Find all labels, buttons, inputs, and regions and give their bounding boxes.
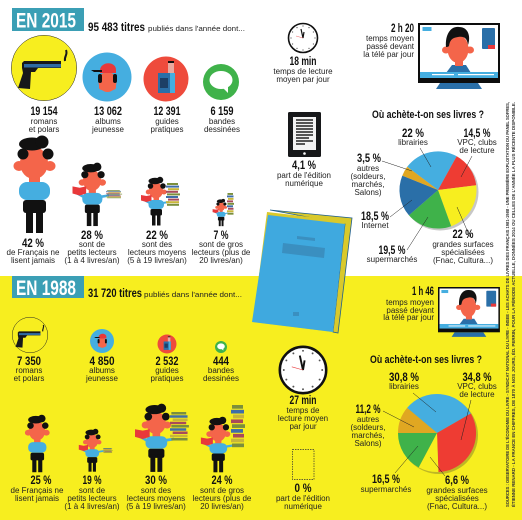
text: sources: SOURCES : OBSERVATOIRE DE L'ÉCONOMIE DU LIVRE - SYNDICAT NATIONAL DU LIVRE - INSEE - LES ACHATS DE LIVRES DES FRANÇAIS 1981-1988 - UNE PREMIÈRE EXPLOITATION DU PANEL SOFRES, bbox=[505, 102, 510, 507]
heading: EN 1988: EN 1988 bbox=[16, 277, 76, 300]
stat: 7%: 7 % bbox=[214, 230, 228, 242]
label: internet 2015: 18,5 % bbox=[361, 211, 389, 223]
label: supermarchés 2015: 19,5 % bbox=[378, 245, 406, 257]
stat: 19%: (1 à 4 livres/an) bbox=[64, 502, 120, 511]
stat: reading time 1988: temps de bbox=[287, 406, 320, 415]
figure: non-reader 2015 bbox=[14, 136, 56, 233]
icon: gun bbox=[11, 35, 77, 101]
figure: small reader 1988 bbox=[79, 429, 113, 472]
leader lines 1988 bbox=[383, 393, 471, 476]
label: librairies 2015: librairies bbox=[398, 138, 428, 147]
figure: small reader 2015 bbox=[72, 163, 122, 226]
label: VPC 2015: VPC, clubs bbox=[457, 138, 497, 147]
label: grandes surfaces 2015: (Fnac, Cultura...) bbox=[433, 256, 493, 265]
stat: reading time 2015: 18 min bbox=[290, 56, 316, 68]
text: sources: ÉTIENNE RENARD - LA FRANCE EN CHIFFRES, DE 1870 À NOS JOURS, ÉD. PERRIN, POUR LA PÉRIODE ACTUELLE, DONNÉES 2014 OU CELLES DE L'ANNÉE LA PLUS RÉCENTE DISPONIBLE. bbox=[511, 102, 516, 507]
stat: digital share 2015 bbox=[277, 160, 331, 188]
text: sources bbox=[505, 102, 516, 507]
stat: TV time 2015: 2 h 20 bbox=[391, 23, 414, 35]
section: 2015 titles bbox=[11, 8, 245, 134]
stat: digital share 2015: numérique bbox=[285, 179, 323, 188]
stat: 7% bbox=[192, 230, 251, 265]
label: supermarchés 2015: supermarchés bbox=[367, 255, 417, 264]
stat: reading time 2015: moyen par jour bbox=[276, 75, 330, 84]
stat: bandes dessinées: dessinées bbox=[204, 125, 240, 134]
label: grandes surfaces 1988: spécialisées bbox=[435, 494, 479, 503]
stat: guides 1988: 2 532 bbox=[156, 356, 178, 368]
stat: 28%: sont de bbox=[79, 240, 106, 249]
stat: BD 1988: bandes bbox=[208, 366, 234, 375]
label: grandes surfaces 1988: grandes surfaces bbox=[426, 486, 488, 495]
figure: non-reader 1988 bbox=[25, 415, 50, 472]
label: autres 1988: marchés, bbox=[352, 431, 384, 440]
section: pie 2015 bbox=[350, 109, 497, 265]
section: 1988 titles bbox=[12, 276, 242, 383]
label: autres 2015: autres bbox=[357, 164, 379, 173]
stat: 7%: 20 livres/an) bbox=[199, 256, 243, 265]
icon: clock 1988 bbox=[280, 347, 326, 393]
chart: pie 2015 bbox=[399, 151, 478, 230]
stat: albums 1988 bbox=[85, 356, 119, 383]
stat: albums jeunesse bbox=[91, 106, 125, 134]
stat: bandes dessinées: bandes bbox=[209, 117, 235, 126]
stat: 30%: (5 à 19 livres/an) bbox=[126, 502, 186, 511]
figure: big reader 1988 bbox=[201, 405, 245, 472]
stat: 28% bbox=[64, 230, 120, 265]
leader lines 2015 bbox=[382, 148, 472, 250]
stat: romans 1988: romans bbox=[16, 366, 42, 375]
label: librairies 2015: 22 % bbox=[402, 128, 424, 140]
stat: reading time 1988: lecture moyen bbox=[278, 414, 328, 423]
label: grandes surfaces 1988 bbox=[426, 475, 488, 511]
label: autres 1988: (soldeurs, bbox=[350, 423, 386, 432]
icon: television 1988 bbox=[438, 287, 500, 337]
stat: digital share 1988: 0 % bbox=[294, 483, 312, 495]
label: grandes surfaces 2015: 22 % bbox=[452, 229, 474, 241]
stat: 25%: lisent jamais bbox=[15, 494, 59, 503]
icon: child 1988 bbox=[90, 329, 114, 353]
label: autres 2015: Salons) bbox=[354, 188, 382, 197]
stat: albums 1988: albums bbox=[89, 366, 115, 375]
icon: travel guide case bbox=[144, 56, 188, 102]
icon: clock 2015 bbox=[288, 24, 318, 52]
section: 1988 readers bbox=[11, 404, 252, 511]
stat: 19%: petits lecteurs bbox=[67, 494, 117, 503]
label: VPC 1988: VPC, clubs bbox=[457, 382, 497, 391]
stat: BD 1988: 444 bbox=[213, 356, 230, 368]
stat: 24%: lecteurs (plus de bbox=[193, 494, 252, 503]
stat: 28%: petits lecteurs bbox=[67, 248, 117, 257]
stat: 22%: lecteurs moyens bbox=[128, 248, 186, 257]
icon: empty e-reader outline bbox=[292, 450, 314, 480]
figure: medium reader 1988 bbox=[135, 404, 189, 472]
text: total titles 2015 bbox=[88, 22, 245, 34]
label: VPC 1988: de lecture bbox=[459, 390, 495, 399]
text: total titles 2015: publiés dans l'année dont... bbox=[148, 24, 245, 33]
stat: 25%: 25 % bbox=[30, 475, 52, 487]
stat: albums jeunesse: albums bbox=[95, 117, 121, 126]
label: librairies 2015 bbox=[398, 128, 428, 147]
stat: 30%: sont des bbox=[141, 486, 171, 495]
stat: TV time 1988: 1 h 46 bbox=[412, 286, 434, 298]
label: internet 2015 bbox=[361, 211, 389, 230]
label: autres 2015: marchés, bbox=[352, 180, 384, 189]
label: grandes surfaces 2015 bbox=[432, 229, 494, 265]
illustration: book bbox=[252, 210, 352, 333]
stat: albums 1988: 4 850 bbox=[90, 356, 114, 368]
text: total titles 1988 bbox=[88, 288, 242, 300]
stat: TV time 2015: la télé par jour bbox=[363, 50, 414, 59]
stat: digital share 2015: part de l'édition bbox=[277, 171, 331, 180]
section: pie 1988 bbox=[350, 354, 497, 511]
stat: guides 1988 bbox=[151, 356, 183, 383]
stat: 22% bbox=[127, 230, 187, 265]
stat: digital share 1988: numérique bbox=[284, 502, 322, 511]
stat: romans et polars: 19 154 bbox=[30, 106, 58, 118]
stat: BD 1988 bbox=[203, 356, 239, 383]
icon: bubble 1988 bbox=[215, 341, 227, 353]
panel: white background 2015 bbox=[0, 0, 522, 276]
stat: 42%: 42 % bbox=[22, 238, 44, 250]
stat: TV time 2015: passé devant bbox=[366, 42, 415, 51]
icon: television 2015 bbox=[418, 23, 500, 89]
stat: 25% bbox=[11, 475, 64, 503]
stat: 19%: sont de bbox=[79, 486, 106, 495]
figure: medium reader 2015 bbox=[141, 177, 180, 226]
label: autres 2015: (soldeurs, bbox=[350, 172, 386, 181]
label: VPC 2015: 14,5 % bbox=[464, 128, 490, 140]
stat: guides pratiques: 12 391 bbox=[154, 106, 181, 118]
stat: 19% bbox=[64, 475, 120, 511]
stat: guides pratiques: guides bbox=[155, 117, 179, 126]
stat: BD 1988: dessinées bbox=[203, 374, 239, 383]
stat: 24% bbox=[193, 475, 252, 511]
figure: big reader 2015 bbox=[213, 193, 234, 226]
label: autres 2015: 3,5 % bbox=[357, 153, 381, 165]
stat: 7%: sont de gros bbox=[199, 240, 243, 249]
stat: 30%: lecteurs moyens bbox=[127, 494, 185, 503]
stat: romans et polars bbox=[29, 106, 59, 134]
stat: reading time 1988 bbox=[278, 395, 328, 431]
heading: where to buy 1988: Où achète-t-on ses livres ? bbox=[370, 354, 482, 366]
icon: gun 1988 bbox=[12, 317, 48, 353]
stat: digital share 1988: part de l'édition bbox=[276, 494, 330, 503]
text: total titles 1988: 31 720 titres bbox=[88, 288, 142, 300]
stat: bandes dessinées bbox=[204, 106, 240, 134]
heading: where to buy 2015: Où achète-t-on ses livres ? bbox=[372, 109, 484, 121]
stat: 22%: (5 à 19 livres/an) bbox=[127, 256, 187, 265]
stat: romans et polars: et polars bbox=[29, 125, 59, 134]
stat: TV time 1988: passé devant bbox=[386, 306, 435, 315]
stat: romans 1988: et polars bbox=[14, 374, 44, 383]
label: librairies 1988: 30,8 % bbox=[389, 372, 419, 384]
heading: EN 2015: EN 2015 bbox=[16, 10, 76, 32]
stat: TV time 2015 bbox=[363, 23, 415, 59]
stat: 25%: de Français ne bbox=[11, 486, 64, 495]
label: autres 1988: Salons) bbox=[354, 439, 382, 448]
chart: pie 1988 bbox=[398, 394, 478, 474]
label: supermarchés 1988: supermarchés bbox=[361, 485, 411, 494]
stat: digital share 2015: 4,1 % bbox=[292, 160, 316, 172]
section: 2015 readers bbox=[7, 136, 251, 265]
stat: 19%: 19 % bbox=[82, 475, 102, 487]
stat: 22%: 22 % bbox=[146, 230, 168, 242]
label: VPC 2015 bbox=[457, 128, 497, 155]
stat: albums jeunesse: jeunesse bbox=[91, 125, 125, 134]
icon: case 1988 bbox=[158, 334, 176, 354]
label: supermarchés 1988 bbox=[361, 474, 411, 494]
label: grandes surfaces 1988: 6,6 % bbox=[445, 475, 469, 487]
stat: guides pratiques bbox=[151, 106, 183, 134]
label: librairies 1988: librairies bbox=[389, 382, 419, 391]
label: autres 1988: 11,2 % bbox=[356, 404, 380, 416]
text: total titles 2015: 95 483 titres bbox=[88, 22, 145, 34]
stat: romans et polars: romans bbox=[31, 117, 57, 126]
stat: 22%: sont des bbox=[142, 240, 172, 249]
stat: TV time 1988 bbox=[383, 286, 435, 322]
stat: 42%: lisent jamais bbox=[11, 256, 55, 265]
stat: romans 1988: 7 350 bbox=[17, 356, 41, 368]
label: VPC 2015: de lecture bbox=[459, 146, 495, 155]
stat: 7%: lecteurs (plus de bbox=[192, 248, 251, 257]
stat: 42% bbox=[7, 238, 60, 265]
label: autres 2015 bbox=[350, 153, 386, 197]
stat: digital share 1988 bbox=[276, 483, 330, 511]
label: VPC 1988 bbox=[457, 372, 497, 399]
stat: reading time 1988: par jour bbox=[289, 422, 317, 431]
stat: 30% bbox=[126, 475, 186, 511]
panel: yellow background 1988 bbox=[0, 276, 522, 520]
stat: bandes dessinées: 6 159 bbox=[210, 106, 234, 118]
stat: 30%: 30 % bbox=[145, 475, 167, 487]
label: supermarchés 2015 bbox=[367, 245, 417, 264]
label: internet 2015: Internet bbox=[361, 221, 389, 230]
label: grandes surfaces 2015: grandes surfaces bbox=[432, 240, 494, 249]
label: autres 1988: autres bbox=[357, 415, 379, 424]
stat: romans 1988 bbox=[14, 356, 44, 383]
stat: 24%: 20 livres/an) bbox=[200, 502, 244, 511]
stat: reading time 2015: temps de lecture bbox=[273, 67, 333, 76]
label: grandes surfaces 2015: spécialisées bbox=[441, 248, 485, 257]
icon: e-reader bbox=[288, 112, 321, 157]
stat: guides pratiques: pratiques bbox=[151, 125, 183, 134]
stat: 24%: 24 % bbox=[212, 475, 232, 487]
stat: reading time 2015 bbox=[273, 56, 333, 84]
stat: 42%: de Français ne bbox=[7, 248, 60, 257]
stat: 24%: sont de gros bbox=[200, 486, 244, 495]
label: supermarchés 1988: 16,5 % bbox=[372, 474, 400, 486]
icon: child with cap bbox=[82, 52, 132, 102]
stat: reading time 1988: 27 min bbox=[290, 395, 316, 407]
stat: 28%: (1 à 4 livres/an) bbox=[64, 256, 120, 265]
stat: guides 1988: guides bbox=[155, 366, 179, 375]
stat: 28%: 28 % bbox=[81, 230, 103, 242]
stat: guides 1988: pratiques bbox=[151, 374, 183, 383]
stat: albums 1988: jeunesse bbox=[85, 374, 119, 383]
icon: speech bubble bbox=[203, 64, 239, 100]
text: total titles 1988: publiés dans l'année dont... bbox=[144, 290, 242, 299]
label: VPC 1988: 34,8 % bbox=[462, 372, 492, 384]
label: autres 1988 bbox=[350, 404, 386, 448]
stat: TV time 1988: la télé par jour bbox=[383, 313, 434, 322]
label: librairies 1988 bbox=[389, 372, 419, 391]
stat: TV time 2015: temps moyen bbox=[366, 34, 414, 43]
stat: TV time 1988: temps moyen bbox=[386, 298, 434, 307]
label: grandes surfaces 1988: (Fnac, Cultura...) bbox=[427, 502, 487, 511]
stat: albums jeunesse: 13 062 bbox=[94, 106, 122, 118]
